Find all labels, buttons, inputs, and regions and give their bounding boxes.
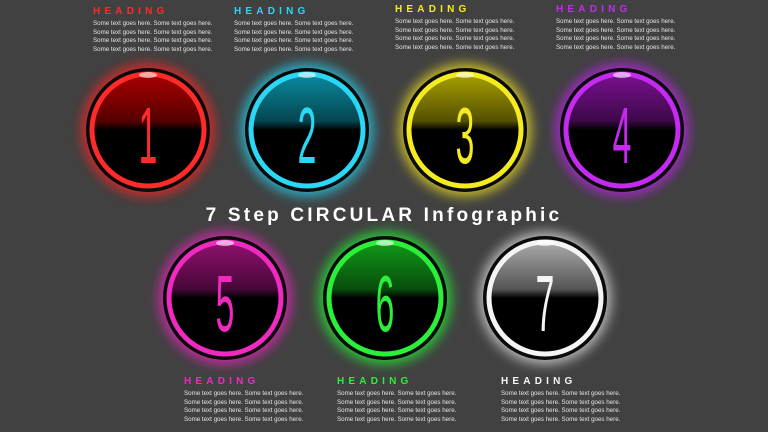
circle 4 bbox=[556, 64, 688, 196]
text block 4: Some text goes here. Some text goes here. Some text goes here. Some text goes here. Some text goes here. Some text goes here. Some text goes here. Some text goes here. bbox=[556, 18, 675, 51]
circle 7: 7 bbox=[536, 259, 554, 349]
text block 7: HEADING bbox=[501, 376, 577, 387]
circle 2 bbox=[241, 64, 373, 196]
text block 4: HEADING bbox=[556, 4, 632, 15]
circle 5 bbox=[159, 232, 291, 364]
circle 1 bbox=[82, 64, 214, 196]
circle 2: 2 bbox=[298, 91, 316, 181]
circle 5: 5 bbox=[216, 259, 234, 349]
text block 3: Some text goes here. Some text goes here. Some text goes here. Some text goes here. Some text goes here. Some text goes here. Some text goes here. Some text goes here. bbox=[395, 18, 514, 51]
circle 4: 4 bbox=[613, 91, 631, 181]
circle 6 bbox=[319, 232, 451, 364]
circle 6: 6 bbox=[376, 259, 394, 349]
title: 7 Step CIRCULAR Infographic bbox=[206, 205, 562, 226]
circle 1: 1 bbox=[139, 91, 157, 181]
text block 7: Some text goes here. Some text goes here. Some text goes here. Some text goes here. Some text goes here. Some text goes here. Some text goes here. Some text goes here. bbox=[501, 390, 620, 423]
text block 2: Some text goes here. Some text goes here. Some text goes here. Some text goes here. Some text goes here. Some text goes here. Some text goes here. Some text goes here. bbox=[234, 20, 353, 53]
text block 5: HEADING bbox=[184, 376, 260, 387]
text block 5: Some text goes here. Some text goes here. Some text goes here. Some text goes here. Some text goes here. Some text goes here. Some text goes here. Some text goes here. bbox=[184, 390, 303, 423]
text block 6: Some text goes here. Some text goes here. Some text goes here. Some text goes here. Some text goes here. Some text goes here. Some text goes here. Some text goes here. bbox=[337, 390, 456, 423]
circle 7 bbox=[479, 232, 611, 364]
text block 3: HEADING bbox=[395, 4, 471, 15]
text block 1: HEADING bbox=[93, 6, 169, 17]
text block 1: Some text goes here. Some text goes here. Some text goes here. Some text goes here. Some text goes here. Some text goes here. Some text goes here. Some text goes here. bbox=[93, 20, 212, 53]
text block 2: HEADING bbox=[234, 6, 310, 17]
text block 6: HEADING bbox=[337, 376, 413, 387]
circle 3 bbox=[399, 64, 531, 196]
circle 3: 3 bbox=[456, 91, 474, 181]
